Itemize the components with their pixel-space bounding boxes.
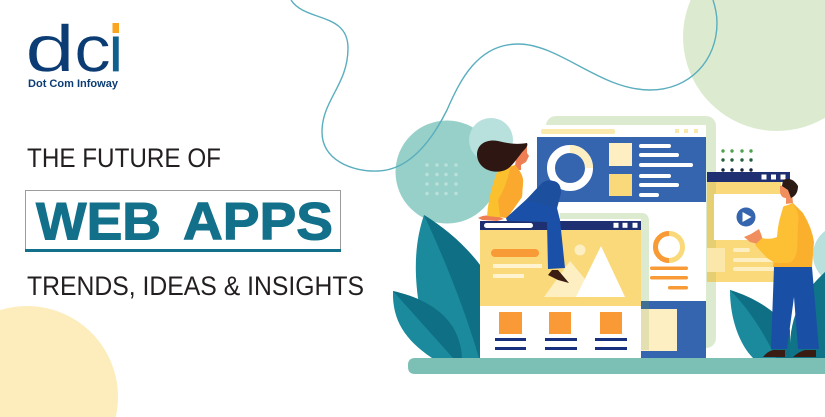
heading box: web apps: WEB	[36, 192, 161, 252]
icon: play button	[736, 208, 756, 226]
image placeholder: mountains	[544, 244, 625, 297]
decorative curve	[291, 0, 717, 171]
logo: i	[108, 12, 123, 86]
base platform	[408, 358, 825, 374]
background circle: cream	[0, 306, 118, 417]
figure: standing man	[744, 179, 819, 357]
dot grid: green	[721, 149, 753, 172]
background circle: green	[683, 0, 825, 131]
circle: teal with dots	[396, 118, 513, 224]
plant: right leaves	[730, 272, 825, 358]
logo: d	[25, 12, 75, 86]
plant: left leaves	[393, 215, 480, 358]
panel: front browser window	[480, 221, 641, 358]
heading: trends ideas insights: TRENDS, IDEAS & INSIGHTS	[27, 271, 364, 301]
donut chart: orange	[656, 234, 682, 260]
heading box: web apps	[25, 190, 341, 252]
heading: the future of: THE FUTURE OF	[27, 143, 221, 173]
donut chart: white	[551, 149, 589, 187]
logo: c	[74, 12, 111, 86]
figure: seated woman	[477, 141, 569, 283]
logo: Dot Com Infoway	[28, 78, 119, 90]
heading box: web apps: APPS	[183, 192, 333, 252]
background circle: pale teal right	[813, 231, 825, 279]
panel: green frame behind browser	[560, 213, 649, 350]
panel: back dashboard	[537, 116, 716, 358]
panel: right video browser	[707, 172, 790, 282]
logo	[25, 12, 123, 90]
